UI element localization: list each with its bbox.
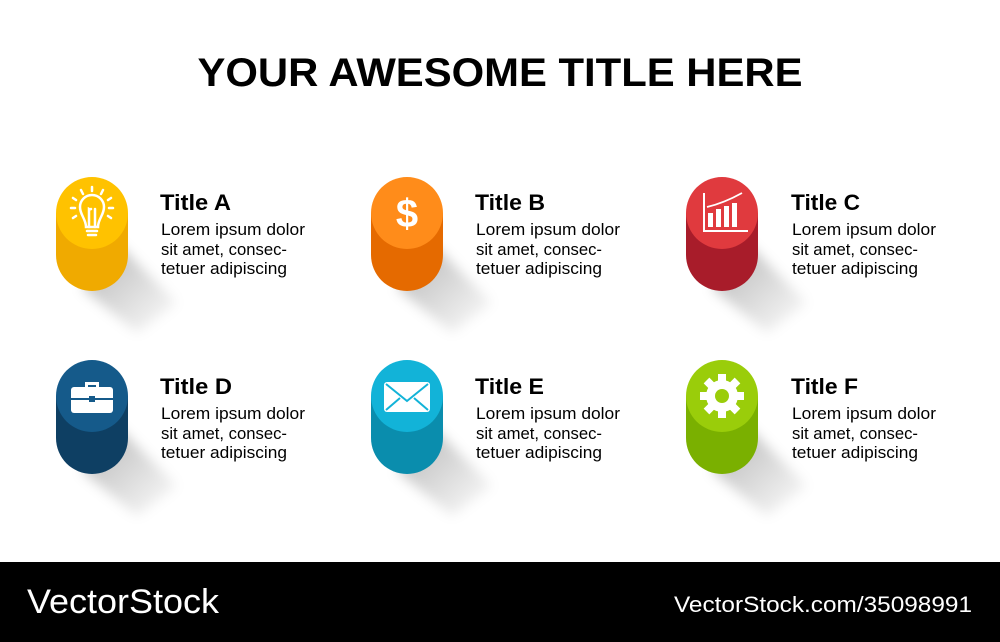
text C: Title C [791, 190, 860, 215]
text E: sit amet, consec- [476, 424, 602, 443]
text A: Title A [160, 190, 231, 215]
text C: sit amet, consec- [792, 240, 918, 259]
text D: tetuer adipiscing [161, 443, 287, 462]
text D: sit amet, consec- [161, 424, 287, 443]
text E: tetuer adipiscing [476, 443, 602, 462]
text E: Title E [475, 374, 544, 399]
cylinder B [371, 177, 443, 291]
footer bar [0, 562, 1000, 642]
cylinder A [56, 177, 128, 291]
cylinder F [686, 360, 758, 474]
text B: tetuer adipiscing [476, 259, 602, 278]
shadow B [397, 243, 492, 333]
text A: Lorem ipsum dolor [161, 220, 305, 239]
text C: Lorem ipsum dolor [792, 220, 936, 239]
item C [686, 177, 807, 333]
icon: chart [704, 193, 748, 231]
text C [791, 190, 936, 278]
icon: dollar: $ [396, 192, 418, 236]
cylinder C [686, 177, 758, 291]
text D: Title D [160, 374, 232, 399]
item F [686, 360, 807, 516]
item E [371, 360, 492, 516]
text C: tetuer adipiscing [792, 259, 918, 278]
text D [160, 374, 305, 462]
shadow D [82, 426, 177, 516]
text A: sit amet, consec- [161, 240, 287, 259]
text F: tetuer adipiscing [792, 443, 918, 462]
cylinder D [56, 360, 128, 474]
text B: Title B [475, 190, 545, 215]
text E [475, 374, 620, 462]
shadow A [82, 243, 177, 333]
item B [371, 177, 492, 333]
text B: sit amet, consec- [476, 240, 602, 259]
shadow F [712, 426, 807, 516]
text E: Lorem ipsum dolor [476, 404, 620, 423]
footer logo: VectorStock [27, 583, 220, 621]
footer url: VectorStock.com/35098991 [674, 592, 972, 617]
text F [791, 374, 936, 462]
text B: Lorem ipsum dolor [476, 220, 620, 239]
text D: Lorem ipsum dolor [161, 404, 305, 423]
cylinder E [371, 360, 443, 474]
text F: Title F [791, 374, 858, 399]
text A: tetuer adipiscing [161, 259, 287, 278]
item A [56, 177, 177, 333]
text F: Lorem ipsum dolor [792, 404, 936, 423]
text A [160, 190, 305, 278]
shadow E [397, 426, 492, 516]
shadow C [712, 243, 807, 333]
icon: gear [700, 374, 744, 418]
icon: envelope [384, 382, 430, 412]
item D [56, 360, 177, 516]
title: YOUR AWESOME TITLE HERE [198, 51, 802, 95]
text F: sit amet, consec- [792, 424, 918, 443]
icon: briefcase [71, 382, 113, 413]
text B [475, 190, 620, 278]
icon: light bulb [71, 187, 113, 235]
